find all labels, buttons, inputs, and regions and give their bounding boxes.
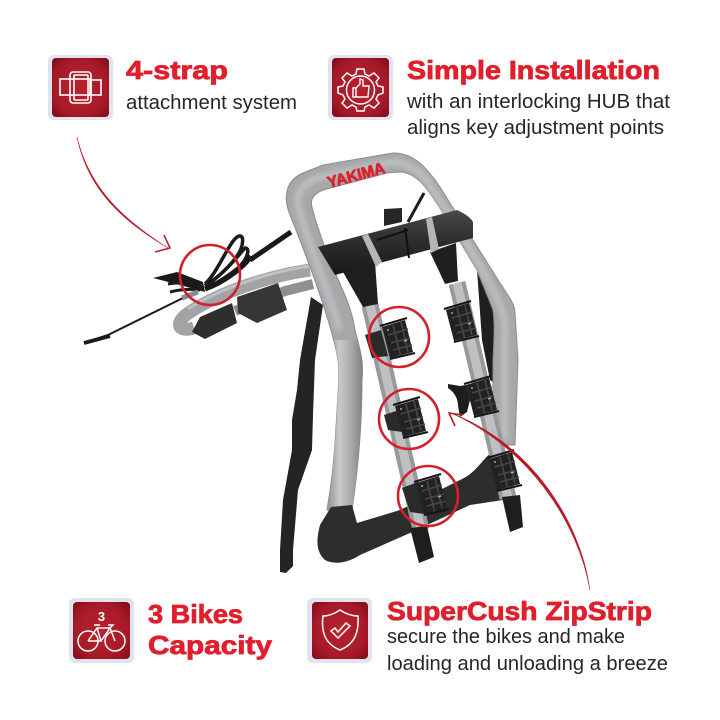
arrow: to zipstrip — [449, 413, 590, 590]
rear support arm with foam blocks — [179, 266, 313, 339]
rear strap pad — [477, 270, 499, 385]
highlight circle: middle clip — [379, 389, 439, 449]
strap with loops — [84, 232, 291, 343]
highlight circle: lower clip — [398, 466, 458, 526]
panel: 4-strap feature — [48, 55, 297, 120]
highlight circle: top clip — [369, 307, 429, 367]
icon: strap attachment — [48, 55, 113, 120]
text: installation description: with an interlocking HUB that — [406, 91, 670, 113]
text: installation description — [406, 91, 670, 139]
black lower bar and foot — [317, 450, 510, 563]
bike clips — [365, 301, 522, 515]
heading: Simple Installation: Simple Installation — [407, 55, 660, 85]
panel: simple installation feature — [328, 55, 670, 139]
text: zipstrip description: secure the bikes and make — [387, 626, 625, 648]
lower side strap — [280, 297, 323, 573]
text: installation description: aligns key adjustment points — [407, 117, 664, 139]
highlight circle: strap — [180, 245, 240, 305]
icon: gear with thumbs up — [328, 55, 393, 120]
heading: 3 Bikes Capacity: Capacity — [148, 630, 273, 660]
arrow: to strap — [77, 137, 170, 252]
text: zipstrip description: loading and unloading a breeze — [387, 653, 668, 675]
heading: 4-strap: 4-strap — [126, 55, 228, 85]
top strap and handle — [384, 193, 424, 226]
text: zipstrip description — [387, 626, 668, 675]
heading: SuperCush ZipStrip: SuperCush ZipStrip — [387, 596, 652, 626]
bike rack product illustration — [84, 153, 523, 573]
front arms — [370, 283, 523, 563]
text: attachment system: attachment system — [126, 92, 297, 114]
panel: 3 bikes capacity feature — [69, 598, 273, 663]
icon: bicycle with 3 — [69, 598, 134, 663]
silver main frame — [286, 153, 518, 510]
heading: 3 Bikes Capacity: 3 Bikes — [148, 599, 243, 629]
YAKIMA logo: YAKIMA — [326, 160, 387, 192]
heading: 3 Bikes Capacity — [148, 599, 273, 660]
hub cylinder — [318, 210, 473, 307]
icon: bicycle with 3: 3 — [98, 609, 105, 624]
panel: SuperCush ZipStrip feature — [307, 596, 668, 675]
icon: shield with check — [307, 598, 372, 663]
